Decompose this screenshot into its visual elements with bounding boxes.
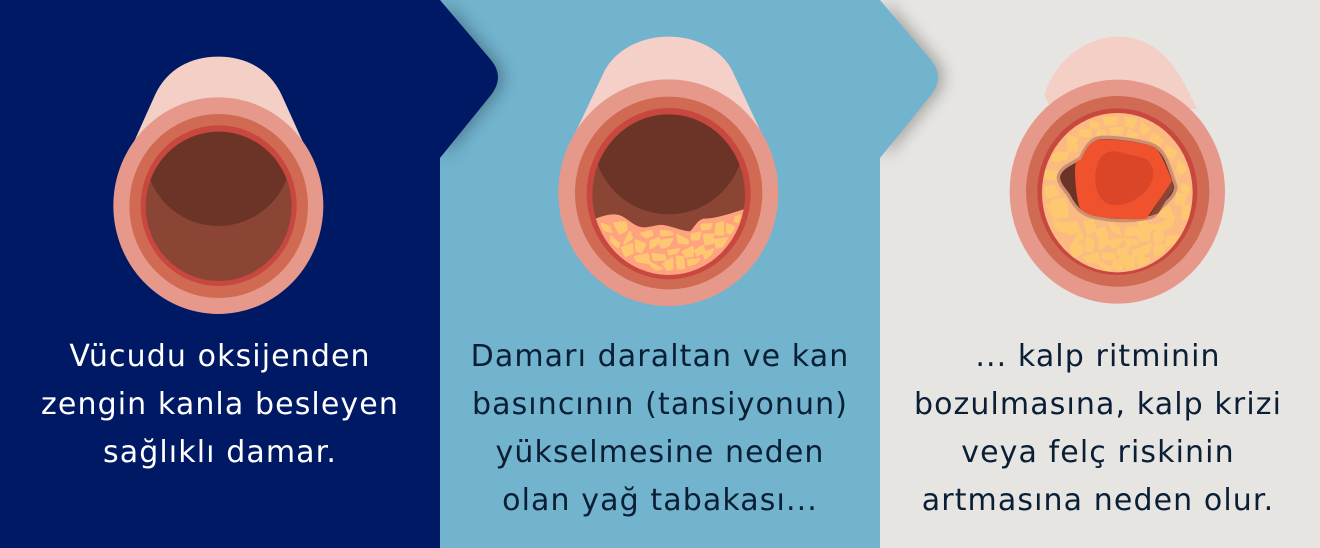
text: healthy artery caption: sağlıklı damar. bbox=[103, 435, 337, 470]
text: blockage caption: veya felç riskinin bbox=[961, 435, 1235, 470]
text: fatty layer caption: Damarı daraltan ve kan bbox=[471, 339, 849, 374]
icon: blocked artery with clot bbox=[1010, 37, 1225, 304]
text: blockage caption: bozulmasına, kalp krizi bbox=[914, 387, 1282, 422]
text: fatty layer caption bbox=[471, 339, 849, 518]
icon: narrowed artery with fat bbox=[558, 37, 778, 306]
text: blockage caption: artmasına neden olur. bbox=[922, 483, 1274, 518]
text: fatty layer caption: olan yağ tabakası... bbox=[502, 483, 818, 518]
panel: healthy artery bbox=[0, 0, 503, 548]
panel: blockage and risk bbox=[916, 36, 1278, 510]
text: fatty layer caption: basıncının (tansiyonun) bbox=[472, 387, 848, 422]
panel: fatty layer bbox=[440, 0, 943, 548]
text: blockage caption bbox=[914, 339, 1282, 518]
text: healthy artery caption: Vücudu oksijenden bbox=[69, 339, 371, 374]
text: fatty layer caption: yükselmesine neden bbox=[496, 435, 824, 470]
text: healthy artery caption bbox=[41, 339, 399, 470]
text: healthy artery caption: zengin kanla besleyen bbox=[41, 387, 399, 422]
icon: healthy artery bbox=[113, 57, 323, 314]
text: blockage caption: ... kalp ritminin bbox=[975, 339, 1221, 374]
